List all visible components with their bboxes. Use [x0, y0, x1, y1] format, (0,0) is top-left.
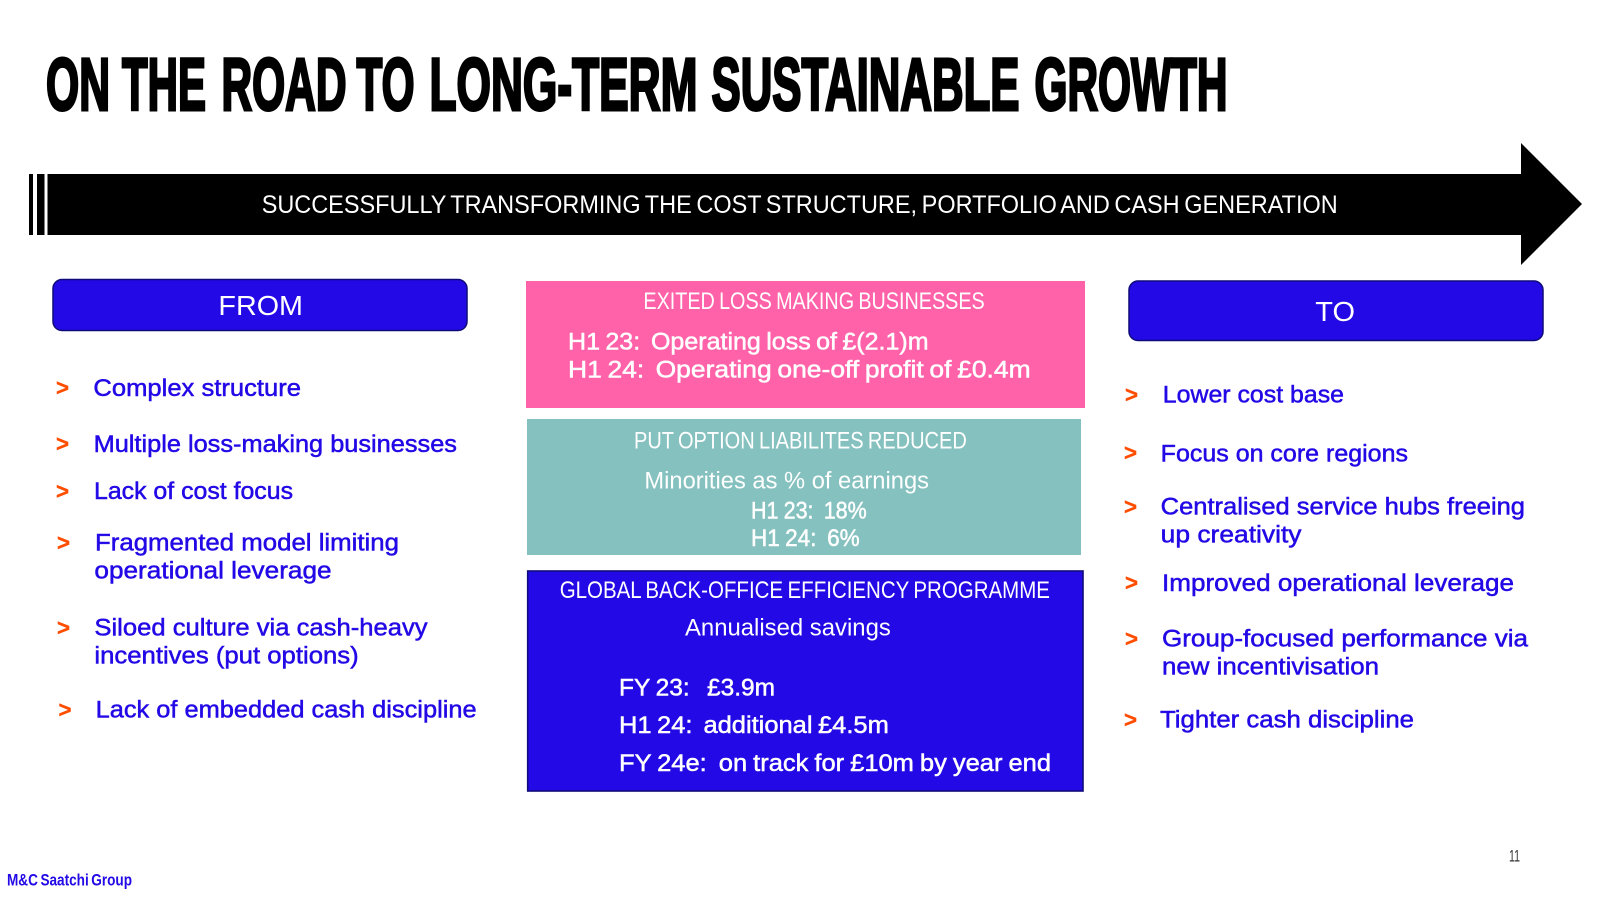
bullet: service hubs: Centralised service hubs freeing — [1161, 493, 1525, 520]
footer logo text: M&C Saatchi Group — [7, 872, 132, 890]
bullet: operational leverage: Improved operational leverage — [1162, 570, 1514, 597]
bullet: siloed culture — [57, 614, 428, 669]
blue subheading: Annualised savings — [685, 614, 891, 641]
from header: FROM — [218, 290, 303, 321]
bullet: cost focus: > — [56, 478, 69, 504]
bullet: siloed culture: Siloed culture via cash-heavy — [94, 614, 428, 641]
bullet: loss-making businesses: Multiple loss-making businesses — [94, 431, 457, 458]
panel: exited loss making businesses — [526, 281, 1085, 408]
title: TO — [356, 43, 414, 126]
bullet: tighter cash discipline: Tighter cash discipline — [1160, 707, 1414, 734]
bullet: complex structure: Complex structure — [93, 375, 301, 402]
bullet: siloed culture: incentives (put options) — [94, 642, 359, 669]
panel: global back-office efficiency programme — [528, 571, 1083, 791]
panel: from — [53, 280, 477, 723]
arrow shape — [48, 143, 1582, 265]
teal text — [644, 467, 929, 552]
pink text: H1 23: Operating loss of £(2.1)m — [568, 328, 929, 355]
bullet: operational leverage: > — [1125, 570, 1138, 596]
pink text: H1 24: Operating one-off profit of £0.4m — [568, 356, 1031, 383]
bullet: core regions: Focus on core regions — [1161, 440, 1408, 468]
teal heading: PUT OPTION LIABILITES REDUCED — [634, 427, 967, 454]
title: ON — [46, 43, 110, 126]
pink heading: EXITED LOSS MAKING BUSINESSES — [643, 288, 985, 315]
bullet: tighter cash discipline: > — [1124, 706, 1137, 732]
title: ROAD — [222, 43, 346, 126]
arrow banner — [29, 143, 1582, 265]
blue heading: GLOBAL BACK-OFFICE EFFICIENCY PROGRAMME — [560, 577, 1050, 604]
bullet: fragmented model: > — [57, 530, 70, 556]
savings list: FY 24e: on track for £10m by year end — [619, 750, 1051, 777]
to header — [1129, 281, 1543, 340]
from header — [53, 280, 467, 330]
teal text: H1 24: 6% — [751, 525, 860, 552]
title: THE — [122, 43, 206, 126]
bullet: group-focused performance: Group-focused performance via — [1162, 626, 1529, 653]
savings list — [619, 674, 1051, 777]
bullet: cash discipline: Lack of embedded cash discipline — [96, 696, 477, 723]
arrow caption: SUCCESSFULLY TRANSFORMING THE COST STRUCTURE, PORTFOLIO AND CASH GENERATION — [262, 191, 1338, 219]
panel: put option liabilities — [527, 419, 1081, 555]
title: SUSTAINABLE — [712, 43, 1020, 126]
savings list: H1 24: additional £4.5m — [619, 712, 889, 739]
bullet: service hubs: > — [1124, 494, 1137, 520]
bullet: group-focused performance: new incentivisation — [1162, 654, 1379, 681]
bullet: complex structure: > — [56, 374, 69, 400]
bullet: cash discipline: > — [58, 696, 72, 722]
bullet: core regions: > — [1124, 440, 1137, 466]
bullet: loss-making businesses: > — [56, 430, 69, 456]
bullet: lower cost base: > — [1125, 382, 1138, 408]
title — [46, 43, 1228, 126]
bullet: service hubs: up creativity — [1161, 521, 1302, 548]
arrow stripes — [29, 174, 44, 235]
bullet: siloed culture: > — [57, 614, 70, 640]
bullet: group-focused performance — [1125, 626, 1529, 681]
bullet: fragmented model: operational leverage — [94, 558, 332, 585]
panel: to — [1124, 281, 1543, 734]
title: LONG-TERM — [430, 43, 698, 126]
bullet: lower cost base: Lower cost base — [1163, 381, 1344, 408]
bullet: fragmented model: Fragmented model limiting — [95, 530, 399, 557]
bullet: cost focus: Lack of cost focus — [94, 478, 293, 505]
page number: 11 — [1509, 847, 1520, 866]
bullet: fragmented model — [57, 530, 399, 585]
bullet: group-focused performance: > — [1125, 626, 1138, 652]
savings list: FY 23: £3.9m — [619, 674, 775, 701]
teal text: Minorities as % of earnings — [644, 467, 929, 494]
title: GROWTH — [1034, 43, 1228, 126]
teal text: H1 23: 18% — [751, 497, 867, 524]
pink text — [568, 328, 1031, 383]
to header: TO — [1315, 296, 1355, 327]
bullet: service hubs — [1124, 493, 1525, 548]
